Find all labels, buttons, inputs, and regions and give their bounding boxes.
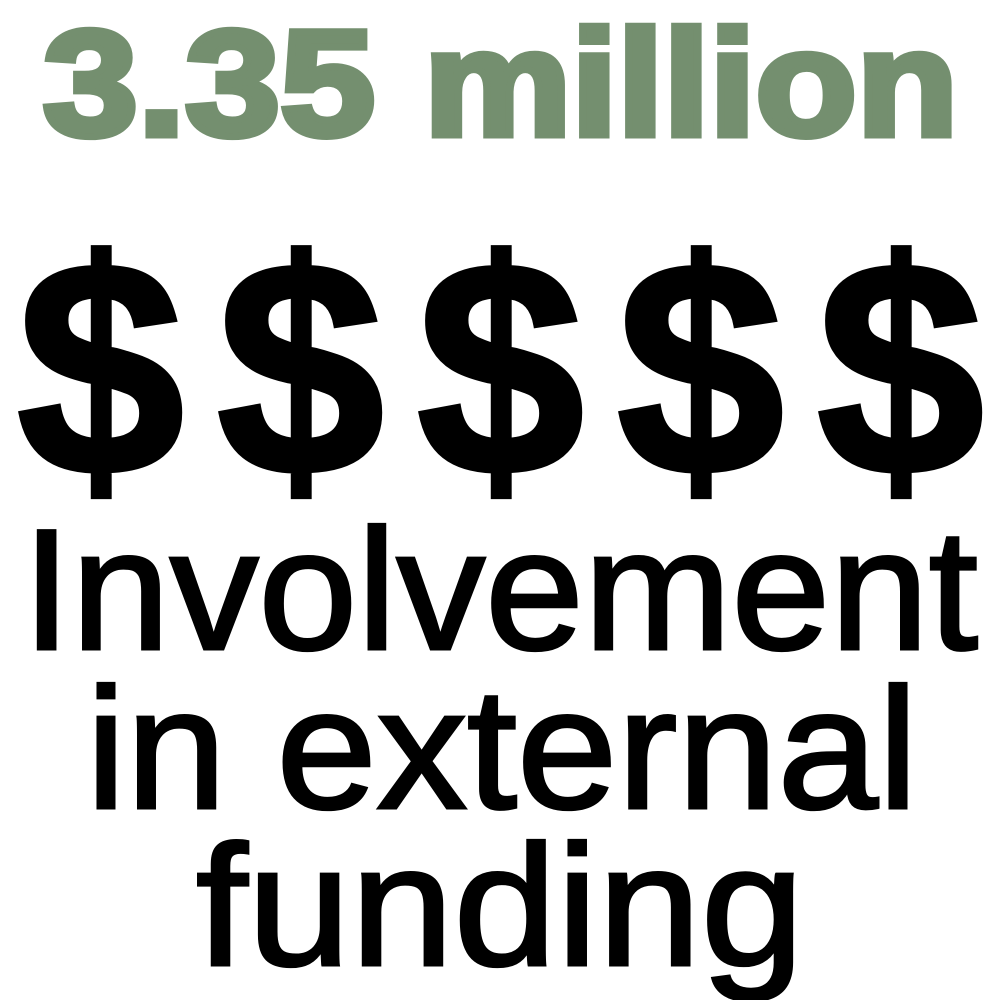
title unit: million (424, 0, 958, 167)
icon: dollar sign 5: $ (817, 198, 984, 539)
title: 3.35 million (43, 0, 958, 167)
caption line 2: in external (86, 653, 918, 845)
icon: dollar sign 3: $ (417, 198, 584, 539)
icon: dollar sign 4: $ (617, 198, 784, 539)
icon: dollar sign 2: $ (217, 198, 384, 539)
title figure: 3.35 (43, 0, 375, 167)
caption line 3: funding (196, 810, 804, 1000)
caption line 1: Involvement (22, 494, 978, 686)
icon: dollar sign 1: $ (17, 198, 184, 539)
caption text (22, 494, 978, 1000)
icon row: dollar signs (17, 198, 984, 539)
